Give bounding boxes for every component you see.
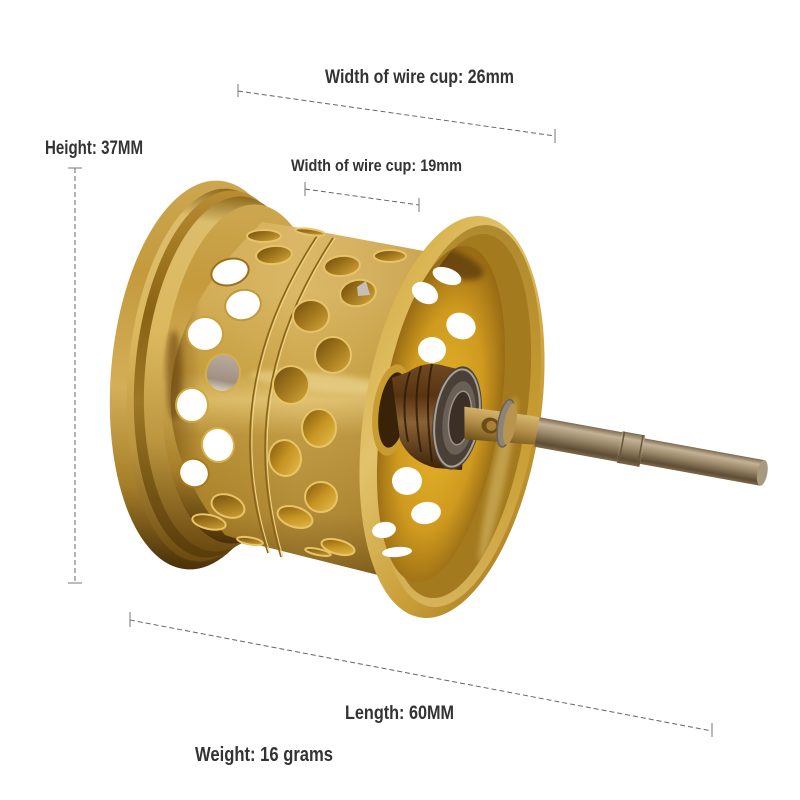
- body grooves: [250, 236, 335, 557]
- shaft: [458, 392, 772, 495]
- inner holes: [371, 263, 480, 558]
- hub gear: [367, 362, 470, 470]
- holes: left row: [174, 230, 293, 547]
- dark shadow near fillet: [166, 330, 182, 420]
- shaft rod: [534, 417, 622, 462]
- dimension: length: [130, 612, 712, 737]
- infographic: spool dimensions: [46, 69, 768, 765]
- spool body: [166, 222, 424, 578]
- polished highlight: [249, 366, 391, 398]
- label: height: Height: 37MM: [45, 138, 143, 159]
- right flange: [360, 216, 545, 618]
- weight label: Weight: 16 grams: [195, 744, 333, 766]
- dimension: wire cup 19mm: [291, 156, 462, 212]
- label: 19mm: Width of wire cup: 19mm: [291, 156, 462, 175]
- left flange: [94, 173, 338, 577]
- dimension: height: [45, 138, 143, 583]
- label: length: Length: 60MM: [345, 703, 454, 724]
- dimension: wire cup 26mm: [238, 67, 555, 143]
- brass collar: [458, 392, 548, 454]
- bearing: [426, 363, 488, 473]
- spool product image: [94, 173, 772, 631]
- label: 26mm: Width of wire cup: 26mm: [325, 67, 514, 88]
- holes: right row: [266, 227, 406, 558]
